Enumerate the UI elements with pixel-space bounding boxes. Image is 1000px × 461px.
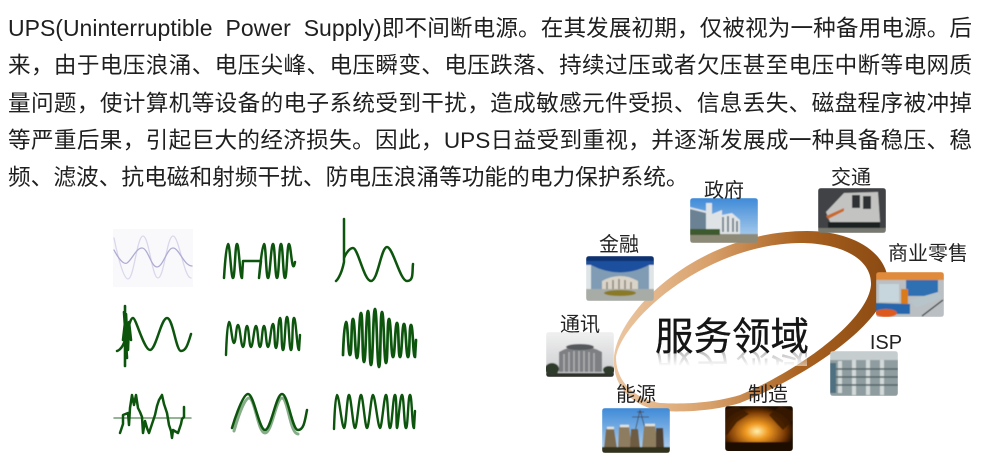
waveform: voltage sag and surge xyxy=(226,317,300,355)
item: 交通: 交通 xyxy=(831,166,871,189)
service ring xyxy=(614,231,888,411)
waveform: power interruption xyxy=(224,244,295,278)
item: 能源: 能源 xyxy=(616,383,656,406)
item: 商业零售: 商业零售 xyxy=(888,242,968,265)
item: 制造: 制造 xyxy=(748,383,788,406)
heading: 服务领域: 服务领域 xyxy=(655,316,809,359)
item: 政府 xyxy=(690,179,758,243)
waveform: transient oscillation xyxy=(117,306,191,366)
text block: UPS introduction: 等严重后果，引起巨大的经济损失。因此，UPS日益受到重视，并逐渐发展成一种具备稳压、稳 xyxy=(8,128,972,153)
waveform grid xyxy=(113,219,416,438)
text block: UPS introduction: UPS(Uninterruptible Power Supply)即不间断电源。在其发展初期，仅被视为一种备用电源。后 xyxy=(8,15,972,41)
item: 能源 xyxy=(602,383,670,453)
waveform: frequency variation xyxy=(334,395,415,429)
text block: UPS introduction: 频、滤波、抗电磁和射频干扰、防电压浪涌等功能的电力保护系统。 xyxy=(8,164,689,190)
waveform: amplitude swell xyxy=(343,309,416,367)
text block: UPS introduction xyxy=(8,15,972,190)
item: ISP: ISP xyxy=(870,332,902,354)
heading: 服务领域: 服务领域 xyxy=(655,344,809,387)
waveform: voltage spike xyxy=(336,219,413,281)
item: 金融 xyxy=(586,233,654,301)
item: 商业零售 xyxy=(875,242,968,317)
text block: UPS introduction: 来，由于电压浪涌、电压尖峰、电压瞬变、电压跌落、持续过压或者欠压甚至电压中断等电网质 xyxy=(8,53,972,78)
item: 交通 xyxy=(818,166,886,233)
item: 通讯 xyxy=(545,313,615,377)
item: 政府: 政府 xyxy=(704,179,744,202)
waveform: noise distortion xyxy=(114,395,191,438)
item: 金融: 金融 xyxy=(599,233,639,256)
waveform: normal sine xyxy=(113,229,193,287)
waveform: harmonic sine xyxy=(232,394,307,434)
text block: UPS introduction: 量问题，使计算机等设备的电子系统受到干扰，造成敏感元件受损、信息丢失、磁盘程序被冲掉 xyxy=(8,91,972,116)
item: 通讯: 通讯 xyxy=(560,313,600,336)
item: ISP xyxy=(830,332,902,396)
item: 制造 xyxy=(725,383,793,452)
